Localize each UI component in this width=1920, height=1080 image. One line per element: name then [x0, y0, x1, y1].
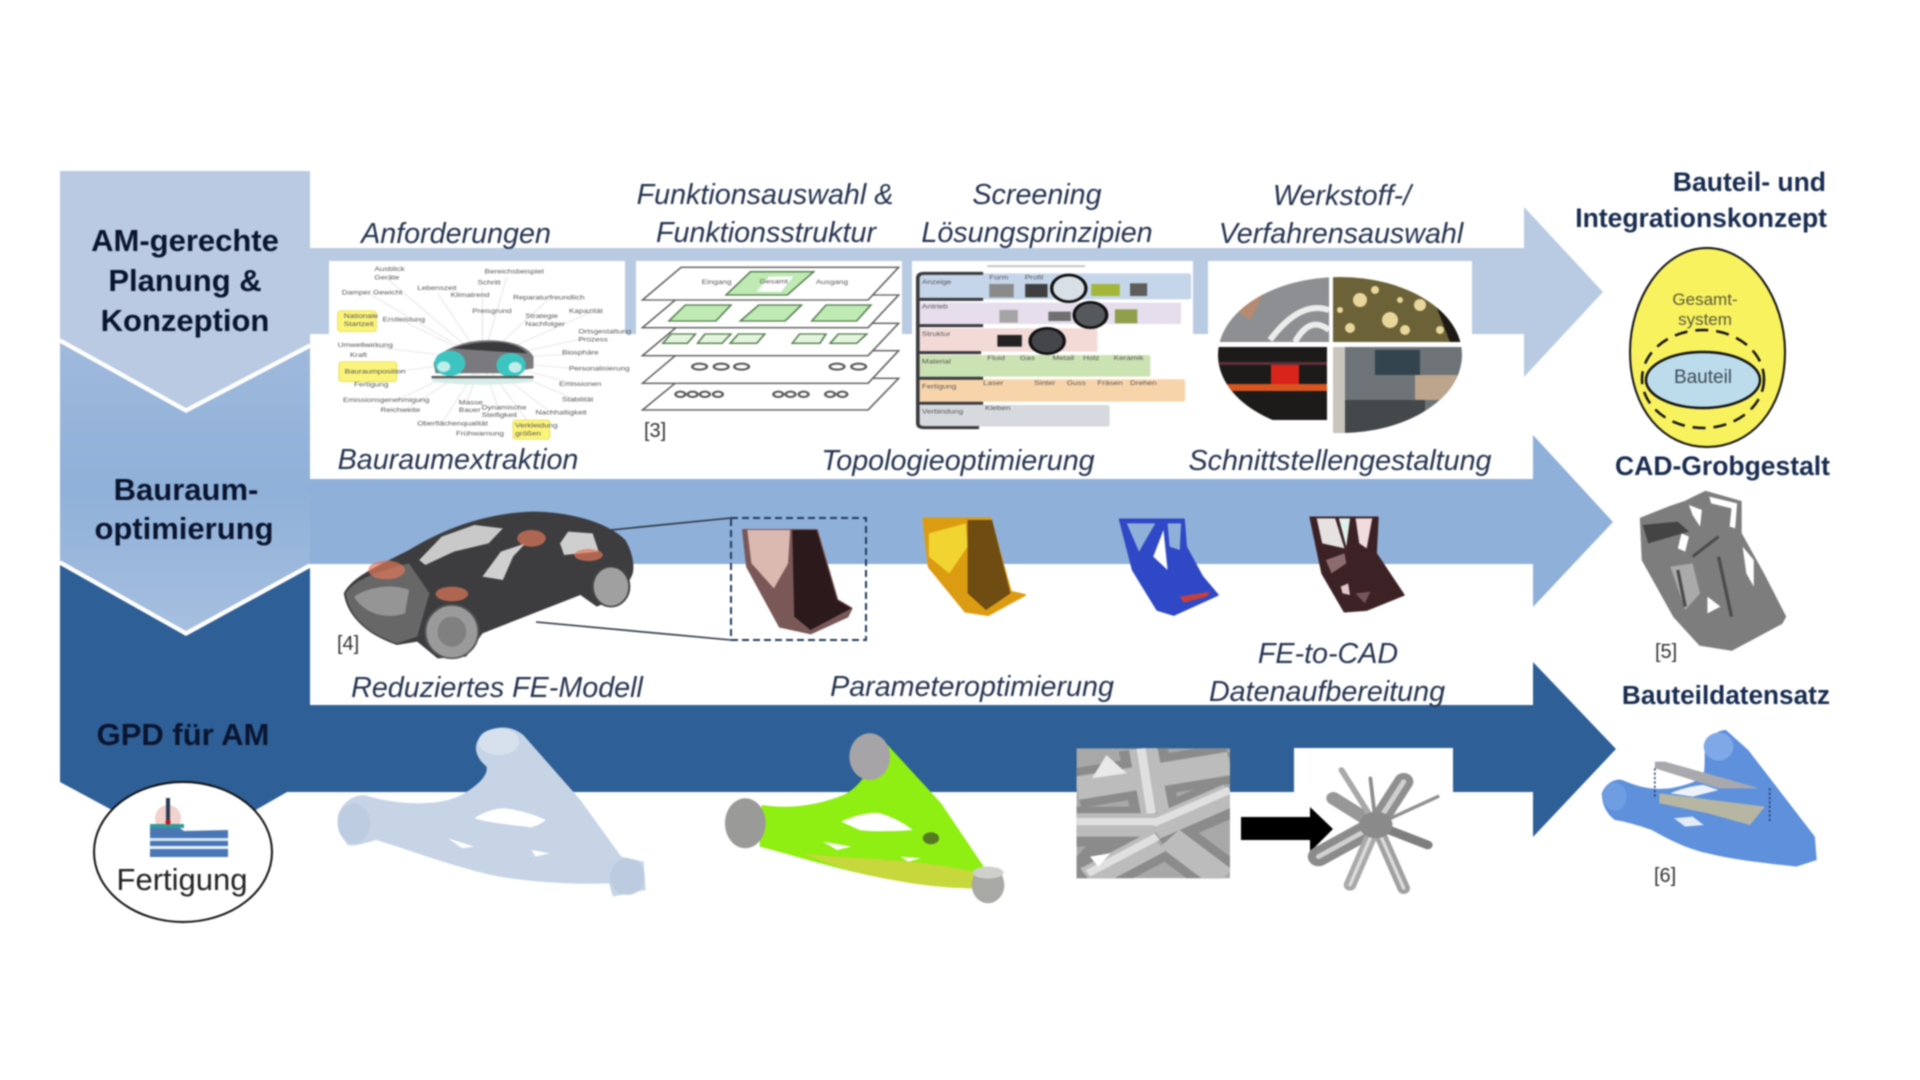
heading: AM-gerechte Planung und Konzeption: Planung &: [108, 263, 262, 298]
diagram: Screening morphological box: Form: [989, 273, 1008, 281]
image: green parameter optimised wishbone: [725, 733, 1004, 903]
chevron block: Planung: [60, 171, 310, 410]
label: Funktionsauswahl und Funktionsstruktur: Funktionsauswahl &: [637, 179, 893, 211]
diagram: Anforderungen car radial: Reichweite: [380, 406, 420, 414]
text: Fertigung: Fertigung: [117, 862, 247, 897]
diagram: Anforderungen car radial: Steifigkeit: [482, 411, 518, 419]
reference: [3]: [3]: [644, 420, 666, 442]
heading: CAD-Grobgestalt: CAD-Grobgestalt: [1615, 451, 1830, 481]
image: bracket design space: [743, 530, 851, 633]
diagram: Screening morphological box: Metall: [1052, 354, 1075, 362]
diagram: Anforderungen car radial: Umweltwirkung: [338, 341, 393, 349]
diagram: Bauteil- und Integrationskonzept egg: system: [1678, 310, 1732, 329]
panel: Bauraumoptimierung row: [60, 343, 1613, 633]
quadrant: red build chamber: [1215, 347, 1327, 420]
reference: [5]: [5]: [1655, 641, 1677, 663]
diagram: Anforderungen car radial: Nationale: [344, 312, 378, 320]
diagram: Anforderungen car radial: Emissionen: [559, 380, 601, 388]
icon group: Fertigung circle: [94, 782, 272, 922]
quadrant: workshop: [1333, 347, 1463, 435]
diagram: Screening morphological box: Antrieb: [922, 302, 948, 310]
heading: GPD für AM: GPD für AM: [97, 717, 269, 752]
diagram: Anforderungen car radial: Masse: [459, 398, 483, 406]
image: blue topology bracket: [1120, 519, 1218, 615]
diagram: Screening morphological box: Profil: [1025, 273, 1044, 281]
label: Funktionsauswahl und Funktionsstruktur: Funktionsstruktur: [656, 217, 877, 249]
diagram: Anforderungen car radial: Nachfolger: [525, 320, 565, 328]
diagram: Anforderungen car radial: Emissionsgenehmigung: [343, 396, 429, 404]
diagram: Anforderungen car radial: Lebenszeit: [417, 284, 458, 292]
arrow: black FE-to-CAD: [1241, 807, 1333, 852]
diagram: Anforderungen car radial: Schritt: [478, 278, 502, 286]
diagram: Anforderungen car radial: Startzeit: [344, 320, 375, 328]
image: CAD coarse geometry: [1641, 492, 1785, 650]
heading: Bauraumoptimierung: optimierung: [94, 511, 274, 546]
diagram: Screening morphological box: [918, 265, 1191, 428]
label: FE-to-CAD Datenaufbereitung: FE-to-CAD: [1258, 638, 1398, 670]
diagram: Anforderungen car radial: Stabilität: [562, 395, 594, 403]
label: Reduziertes FE-Modell: Reduziertes FE-Modell: [351, 672, 645, 704]
heading: Bauraumoptimierung: Bauraum-: [114, 472, 258, 507]
diagram: Screening morphological box: Keramik: [1114, 354, 1144, 362]
diagram: Screening morphological box: Guss: [1067, 379, 1086, 387]
diagram: Screening morphological box: Fluid: [987, 354, 1005, 362]
diagram: Anforderungen car radial: Klimatrend: [451, 291, 490, 299]
diagram: Anforderungen car radial: Bauer: [459, 406, 481, 414]
diagram: Anforderungen car radial: Bereichsbeispiel: [485, 267, 544, 275]
chevron separator lines: [60, 340, 310, 633]
image: lattice close-up: [1077, 748, 1230, 878]
label: Screening Lösungsprinzipien: Lösungsprinzipien: [921, 217, 1153, 249]
heading: Bauteil- und Integrationskonzept: Bauteil- und: [1673, 167, 1826, 197]
diagram: Screening morphological box: Verbindung: [922, 407, 963, 415]
diagram: Anforderungen car radial: Ausblick: [374, 265, 405, 273]
label: Parameteroptimierung: Parameteroptimierung: [830, 671, 1114, 703]
image: light blue FE mesh wishbone: [338, 727, 646, 897]
icon: concept car: [431, 340, 533, 385]
diagram: Anforderungen car radial: [338, 265, 631, 439]
heading: Bauteildatensatz: Bauteildatensatz: [1622, 680, 1830, 710]
connector lines and dashed box: [536, 518, 866, 640]
diagram: Bauteil- und Integrationskonzept egg: [1630, 248, 1785, 447]
arrow: GPD band: [310, 662, 1616, 837]
panel backgrounds: [329, 261, 1472, 793]
arrow: Bauraum band: [310, 435, 1613, 607]
diagram: Anforderungen car radial: Kapazität: [569, 307, 604, 315]
diagram: Screening morphological box: Fräsen: [1097, 379, 1123, 387]
diagram: Anforderungen car radial: Damper Gewicht: [342, 288, 403, 296]
diagram: Funktionsstruktur layers: [642, 267, 899, 410]
diagram: Screening morphological box: Struktur: [922, 330, 951, 338]
diagram: Screening morphological box: Drehen: [1130, 379, 1157, 387]
diagram: Anforderungen car radial: Erstleistung: [383, 315, 425, 323]
label: Schnittstellengestaltung: Schnittstellengestaltung: [1188, 445, 1492, 477]
diagram: Anforderungen car radial: Dynamische: [482, 403, 526, 411]
image: node star lattice: [1319, 770, 1438, 888]
label: Anforderungen: Anforderungen: [359, 218, 551, 250]
label: Screening Lösungsprinzipien: Screening: [972, 179, 1102, 211]
diagram: Screening morphological box: Fertigung: [922, 382, 956, 390]
label: FE-to-CAD Datenaufbereitung: Datenaufbereitung: [1209, 676, 1445, 708]
diagram: Funktionsstruktur layers: Eingang: [702, 278, 731, 286]
diagram: Screening morphological box: Holz: [1083, 354, 1100, 362]
diagram: Screening morphological box: Laser: [983, 379, 1004, 387]
diagram: Bauteil- und Integrationskonzept egg: Bauteil: [1674, 367, 1732, 388]
diagram: Anforderungen car radial: Strategie: [525, 312, 558, 320]
diagram: Anforderungen car radial: größen: [515, 429, 541, 437]
diagram: Anforderungen car radial: Preisgrund: [472, 307, 512, 315]
chevron block: Bauraum: [60, 343, 310, 633]
label: Topologieoptimierung: Topologieoptimierung: [821, 445, 1095, 477]
diagram: Screening morphological box: Sinter: [1034, 379, 1056, 387]
heading: AM-gerechte Planung und Konzeption: Konzeption: [101, 303, 269, 338]
label: Bauraumextraktion: Bauraumextraktion: [338, 444, 578, 476]
diagram: Bauteil- und Integrationskonzept egg: Gesamt-: [1672, 290, 1738, 309]
diagram: Anforderungen car radial: Nachhaltigkeit: [536, 408, 588, 416]
image: final lattice bracket: [1310, 517, 1404, 612]
chevron block: GPD: [60, 565, 310, 850]
diagram: Anforderungen car radial: Verkleidung: [515, 421, 558, 429]
diagram: Anforderungen car radial: Oberflächenqualität: [417, 419, 489, 427]
reference: [6]: [6]: [1654, 865, 1676, 887]
diagram: Screening morphological box: Anzeige: [922, 278, 951, 286]
diagram: Anforderungen car radial: Bauraumposition: [345, 367, 406, 375]
panel: AM-gerechte Planung row: [60, 171, 1603, 410]
diagram: Anforderungen car radial: Geräte: [374, 273, 399, 281]
image: Werkstoff und Verfahren ellipse collage: [1215, 275, 1465, 435]
diagram: Anforderungen car radial: Fertigung: [354, 380, 388, 388]
diagram: Screening morphological box: Gas: [1020, 354, 1035, 362]
diagram: Funktionsstruktur layers: Ausgang: [816, 278, 848, 286]
diagram: Anforderungen car radial: Prozess: [578, 335, 608, 343]
image: orange topology bracket: [924, 518, 1025, 615]
icon: additive manufacturing nozzle and layers: [150, 798, 228, 857]
image: car with bauraum: [344, 512, 633, 658]
label: Werkstoff- und Verfahrensauswahl: Werkstoff-/: [1273, 180, 1414, 212]
heading: Bauteil- und Integrationskonzept: Integrationskonzept: [1575, 203, 1827, 233]
label: Werkstoff- und Verfahrensauswahl: Verfahrensauswahl: [1219, 218, 1465, 250]
quadrant: machine: [1215, 275, 1329, 342]
diagram: Anforderungen car radial: Frühwarnung: [456, 429, 504, 437]
diagram: Funktionsstruktur layers: Gesamt: [760, 277, 789, 285]
diagram: Anforderungen car radial: Ortsgestaltung: [578, 327, 631, 335]
panel: GPD row: [60, 565, 1616, 850]
image: blue final wishbone data set: [1602, 730, 1817, 867]
diagram: Anforderungen car radial: Biosphäre: [562, 348, 599, 356]
arrow: Planung band: [310, 207, 1603, 377]
quadrant: gold lattice: [1333, 275, 1463, 342]
diagram: Anforderungen car radial: Kraft: [350, 351, 368, 359]
diagram: Screening morphological box: Kleben: [985, 404, 1011, 412]
diagram: Anforderungen car radial: Reparaturfreundlich: [513, 293, 585, 301]
diagram: Anforderungen car radial: Personalisierung: [569, 364, 630, 372]
heading: AM-gerechte Planung und Konzeption: AM-gerechte: [91, 223, 279, 258]
reference: [4]: [4]: [337, 633, 359, 655]
diagram: Screening morphological box: Material: [922, 357, 951, 365]
